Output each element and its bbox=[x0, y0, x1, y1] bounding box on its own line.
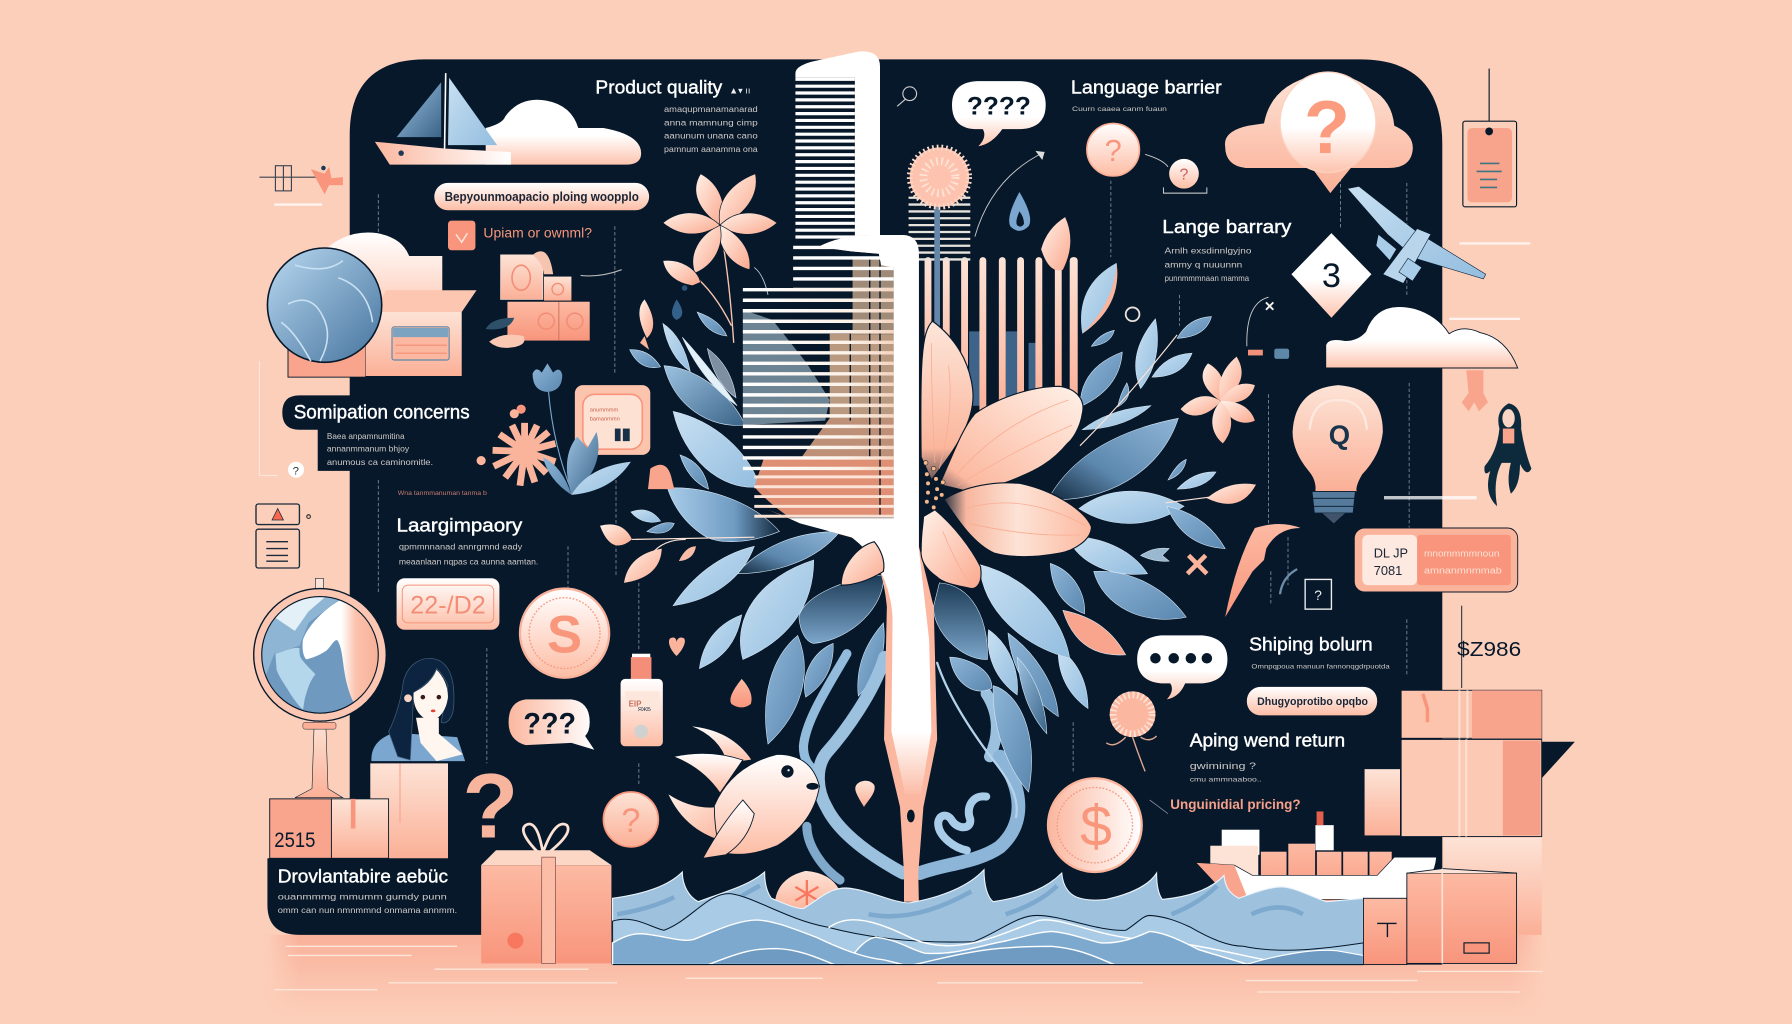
arc with x marker bbox=[1247, 297, 1289, 359]
section: language barrier second bbox=[1162, 216, 1292, 283]
bottle: EIP bbox=[629, 699, 642, 708]
text: language impact: qpmmnnanad annrgmnd eady bbox=[399, 543, 522, 552]
upper short teeth bbox=[799, 246, 887, 288]
flower cluster and label card bbox=[477, 363, 674, 495]
lower teeth bbox=[763, 475, 885, 518]
price note bbox=[1457, 606, 1521, 688]
price text: 2515 bbox=[274, 827, 315, 852]
pill: plain supplier label bbox=[434, 183, 649, 210]
question coins with bracket: ? bbox=[1180, 166, 1189, 183]
coin: S bbox=[520, 589, 609, 678]
shoulders bbox=[371, 733, 465, 761]
dark navy panel bbox=[267, 59, 1442, 965]
big flower bbox=[841, 321, 1091, 589]
side bracket with question dot bbox=[259, 361, 304, 478]
coin: question: ? bbox=[621, 802, 640, 840]
right foliage bbox=[934, 317, 1225, 792]
handle peach base bbox=[768, 235, 937, 902]
middle box bbox=[1401, 739, 1542, 837]
section: shipping return: Shiping bolurn bbox=[1249, 633, 1373, 654]
long hair figure bbox=[1484, 403, 1531, 506]
blue shapes behind teeth bbox=[969, 331, 1042, 411]
heading: Somipation concerns bbox=[294, 401, 470, 423]
upper right petal bbox=[939, 386, 1083, 491]
peach ribbon bbox=[1462, 370, 1488, 411]
text: language impact: Wna tanmmanuman tanma b bbox=[398, 490, 487, 497]
lower petal bbox=[921, 510, 981, 589]
icon: globe with shipping box bbox=[267, 233, 477, 377]
hair bbox=[389, 658, 454, 760]
back comb teeth bbox=[799, 78, 851, 242]
pink starburst bbox=[493, 423, 555, 486]
stand bbox=[295, 720, 343, 798]
section: language barrier bbox=[1071, 77, 1222, 113]
section: language barrier second: Arnlh exsdinnlgyjno bbox=[1165, 247, 1252, 256]
diamond with number 3: 3 bbox=[1322, 257, 1341, 295]
dark triangle bbox=[1542, 742, 1575, 778]
handle hole bbox=[907, 810, 915, 822]
coral box bbox=[270, 799, 331, 858]
coin: dollar: $ bbox=[1080, 795, 1112, 859]
coin: question bbox=[603, 792, 658, 847]
layer a bbox=[613, 894, 1363, 965]
globe on stand bbox=[254, 578, 389, 798]
side bracket with question dot: ? bbox=[293, 465, 299, 477]
label card: price tag bbox=[1354, 528, 1518, 592]
section: shipping and return: gwimining ? bbox=[1190, 761, 1256, 771]
airplane bbox=[1347, 186, 1486, 283]
main teeth bbox=[752, 288, 884, 471]
gift box bbox=[481, 824, 611, 963]
section: product quality: aanunum unana cano bbox=[664, 131, 758, 140]
handle white highlight bbox=[789, 235, 931, 794]
globe sphere bbox=[262, 597, 389, 713]
price badge bbox=[397, 578, 499, 630]
pink star flower with stem bbox=[663, 174, 777, 343]
section: product quality: anna mamnung cimp bbox=[664, 119, 758, 128]
layer b bbox=[613, 920, 903, 965]
section: language barrier: Cuurn caaea canm fuaun bbox=[1072, 106, 1167, 113]
section: language barrier: Language barrier bbox=[1071, 77, 1222, 98]
small side box bbox=[1365, 769, 1400, 835]
flower cluster and label card: anummmm bbox=[590, 407, 618, 413]
boxes under globe with price bbox=[270, 763, 448, 858]
pill: shipping bbox=[1247, 687, 1377, 715]
label card: price tag: 7081 bbox=[1374, 564, 1402, 578]
section: language barrier second: Lange barrary bbox=[1162, 216, 1292, 237]
coin: dollar bbox=[1048, 778, 1168, 872]
light box bbox=[331, 799, 389, 858]
white cloud right bbox=[1326, 307, 1518, 368]
price badge: 22-/D2 bbox=[410, 592, 486, 620]
bridge bbox=[1315, 825, 1334, 850]
back comb bbox=[795, 51, 880, 242]
section: language barrier second: punnmmmnaan mamma bbox=[1165, 274, 1250, 283]
petal veins bbox=[931, 343, 1086, 583]
lid bbox=[481, 850, 611, 865]
screw base bbox=[1312, 491, 1355, 513]
diamond with number 3 bbox=[1291, 233, 1371, 318]
waves bbox=[613, 870, 1363, 965]
label card: price tag: mnommmmnoun bbox=[1424, 549, 1499, 559]
brush bristles bbox=[912, 197, 966, 265]
arrow bbox=[754, 267, 768, 295]
section: language barrier second: ammy q nuuunnn bbox=[1165, 260, 1242, 269]
text lines: Baea anpamnumitina bbox=[327, 432, 405, 441]
text: language impact: meaanlaan nqpas ca aunna aamtan. bbox=[399, 558, 538, 567]
front comb bbox=[743, 235, 937, 902]
text: language impact: Laargimpaory bbox=[397, 514, 523, 535]
chest bbox=[416, 718, 463, 761]
question coins with bracket: ? bbox=[1105, 133, 1122, 168]
top petal bbox=[921, 321, 973, 480]
question mark: ? bbox=[1304, 85, 1350, 169]
brush and vertical comb bbox=[910, 147, 1078, 417]
body bbox=[481, 865, 611, 963]
text lines: amaqupmanamanarad bbox=[664, 105, 758, 114]
reflection dashes bbox=[274, 946, 1543, 992]
face bbox=[414, 670, 448, 720]
text: drovlantable section: ouanmmmg mmumm gumdy punn bbox=[278, 892, 447, 901]
speech bubble: three question marks bbox=[509, 699, 594, 750]
right petal bbox=[944, 483, 1091, 557]
stacked cardboard boxes bbox=[1363, 690, 1575, 965]
wave silhouette bbox=[613, 870, 1363, 965]
lower back box bbox=[1443, 838, 1542, 935]
bow bbox=[523, 824, 568, 857]
section: shipping return bbox=[1249, 633, 1390, 671]
question icons top center bbox=[897, 87, 1139, 321]
small claw and markers bbox=[1187, 524, 1331, 617]
peach leaves and branch bbox=[600, 217, 1256, 583]
label card bbox=[575, 385, 650, 455]
heart and droplets bbox=[669, 637, 875, 807]
pink cloud bbox=[1225, 74, 1413, 193]
text: language impact bbox=[397, 490, 538, 567]
pink x bbox=[1187, 555, 1207, 574]
light bulb bbox=[1293, 385, 1383, 523]
floor reflection bbox=[265, 935, 1545, 1017]
small side petal bbox=[841, 542, 884, 585]
top box bbox=[1401, 690, 1542, 738]
blue lily bbox=[543, 457, 571, 495]
box right panel bbox=[366, 312, 462, 376]
section: shipping and return: cmu ammnaaboo.. bbox=[1190, 777, 1262, 784]
bottle: ЯЖБ bbox=[638, 707, 651, 713]
small front box bbox=[1363, 898, 1407, 965]
label card: price tag: DL JP bbox=[1374, 547, 1408, 561]
label card: price tag: amnanmnmmab bbox=[1424, 566, 1502, 576]
claw shape bbox=[1225, 524, 1301, 617]
front box bbox=[1407, 873, 1517, 963]
white disc bbox=[1280, 72, 1376, 173]
cloud behind boat bbox=[486, 100, 641, 165]
right white dashes bbox=[1384, 242, 1530, 499]
back comb spine bbox=[795, 51, 880, 240]
globe bbox=[267, 248, 382, 362]
left foliage bbox=[630, 312, 884, 744]
tan cells behind teeth bbox=[830, 334, 894, 421]
speech bubble: three question marks: ??? bbox=[523, 708, 576, 741]
section: product quality: pamnum aanamma ona bbox=[664, 145, 758, 154]
back box bbox=[370, 763, 448, 858]
text: drovlantable section: omm can nun nmnmmnd onmama annmm. bbox=[278, 906, 457, 915]
section: semination concerns bbox=[294, 401, 470, 467]
layer e bbox=[1246, 950, 1363, 965]
speech bubble: four question marks: ???? bbox=[967, 92, 1031, 120]
boat sails bbox=[397, 82, 441, 137]
dark cell lines bbox=[850, 257, 880, 517]
filament mark: Q bbox=[1329, 420, 1350, 451]
vines bbox=[803, 654, 1018, 880]
pompom bbox=[910, 147, 969, 207]
hull bbox=[1197, 857, 1437, 899]
section: semination concerns: annanmmanum bhjoy bbox=[327, 444, 409, 453]
section: product quality bbox=[595, 77, 758, 154]
icon: left route marker bbox=[259, 166, 343, 206]
shipping label bbox=[392, 327, 449, 360]
pill: shipping: Dhugyoprotibo opqbo bbox=[1257, 696, 1368, 708]
small claw and markers: ? bbox=[1314, 588, 1322, 603]
flower cluster and label card: bamanmmn bbox=[590, 417, 620, 423]
layer f bbox=[846, 931, 1248, 965]
section: semination concerns: anumous ca caminomitle. bbox=[327, 458, 433, 467]
containers bbox=[1222, 830, 1259, 855]
woman portrait bbox=[371, 658, 465, 761]
section: shipping and return: Aping wend return bbox=[1190, 729, 1345, 750]
icon: sailboat and cloud bbox=[375, 73, 641, 165]
box left panel bbox=[288, 339, 366, 377]
coin: S: S bbox=[547, 606, 582, 665]
container ship bbox=[1197, 811, 1437, 903]
pill: plain supplier label: Bepyounmoapacio ploing woopplo bbox=[445, 190, 639, 204]
document icons bbox=[256, 504, 310, 568]
heading: Product quality bbox=[595, 77, 723, 98]
vertical teeth bbox=[925, 257, 1078, 417]
hanging tag bbox=[1463, 69, 1517, 207]
section: shipping and return bbox=[1170, 729, 1345, 812]
checkbox question: Upiam or ownml? bbox=[483, 226, 592, 241]
shaded crest strokes bbox=[617, 886, 1303, 920]
section: product quality: ▲▾ ıı bbox=[729, 86, 750, 96]
arc with x marker: ✕ bbox=[1264, 299, 1275, 314]
peach pebble bbox=[648, 465, 674, 489]
layer c bbox=[709, 949, 834, 965]
speech bubble: dots bbox=[1137, 635, 1227, 699]
question coins with bracket bbox=[1087, 123, 1207, 193]
starfish shell bbox=[775, 871, 840, 914]
text: drovlantable section: Drovlantabire aebüc bbox=[278, 865, 448, 886]
gray leaf behind teeth bbox=[743, 310, 830, 425]
icon: stacked soap boxes bbox=[486, 251, 622, 348]
speech bubble: four question marks bbox=[952, 81, 1046, 146]
white cloud bbox=[318, 233, 442, 331]
checkbox question bbox=[448, 221, 592, 250]
layer d bbox=[914, 946, 1114, 965]
small peach flower right bbox=[1181, 357, 1255, 443]
price note: $Z986 bbox=[1457, 638, 1521, 661]
bottle bbox=[621, 654, 663, 746]
cloud with question mark bbox=[1225, 72, 1413, 193]
stamens bbox=[923, 461, 945, 510]
frame ring bbox=[254, 589, 386, 721]
dashed guide lines bbox=[378, 178, 1409, 786]
section: shipping and return: Unguinidial pricing? bbox=[1170, 797, 1301, 812]
big question mark: ? bbox=[462, 756, 518, 858]
section: shipping return: Omnpqpoua manuun fannonqgdrpuotda bbox=[1251, 664, 1390, 671]
stem bbox=[693, 226, 734, 343]
dandelion bbox=[1106, 691, 1157, 771]
tulip bbox=[533, 363, 562, 392]
petals bbox=[663, 174, 777, 286]
box with question bbox=[1280, 569, 1297, 594]
text: drovlantable section bbox=[278, 865, 457, 915]
layer a highlight bbox=[829, 920, 1286, 963]
glass bbox=[1293, 385, 1383, 491]
fish bbox=[667, 726, 819, 858]
buds and drop bbox=[639, 285, 687, 350]
boat hull bbox=[375, 142, 511, 165]
